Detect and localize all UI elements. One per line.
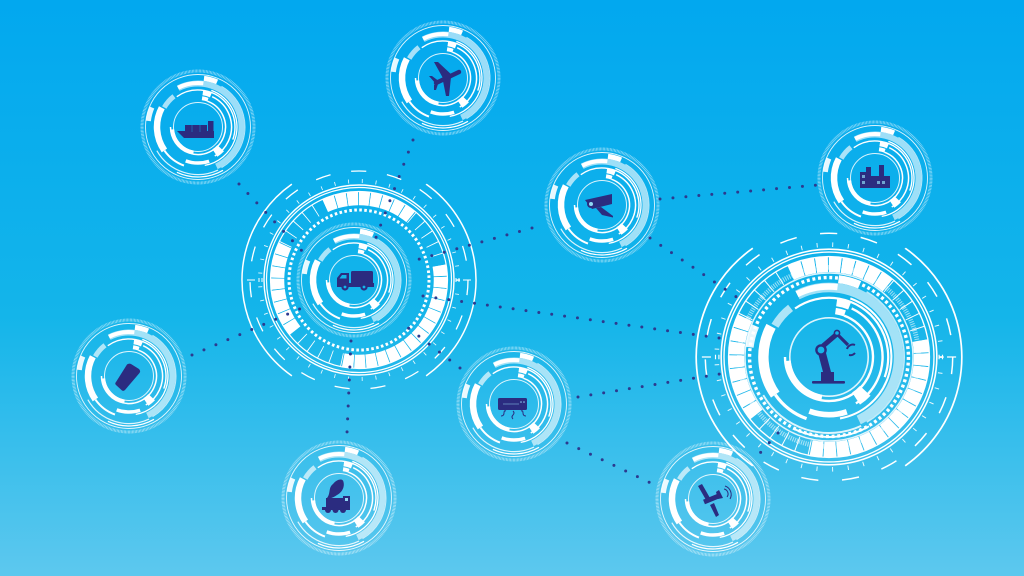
node: air conditioner [446,336,582,472]
hub: robot arm [644,172,1014,542]
node: SIM card [61,308,197,444]
node: satellite [645,431,781,567]
node: cargo ship [130,59,266,195]
icon: ship [177,121,214,138]
truck hub inner dial [286,212,422,348]
icon: robot arm [812,330,855,384]
icon: air conditioner [498,398,527,419]
icon: factory [860,165,890,188]
node: locomotive [271,430,407,566]
icon: security camera [585,194,613,218]
robot hub rings [644,172,1014,542]
robot hub inner dial [720,248,938,466]
icon: satellite [698,484,731,517]
icon: locomotive [322,480,350,513]
node: factory [807,110,943,246]
node: airplane [375,10,511,146]
truck hub rings [196,117,522,443]
hub: delivery truck [196,117,522,443]
dotted connectors [192,140,818,485]
icon: truck [337,271,374,291]
icon: SIM card [115,364,140,391]
icon: airplane [429,62,459,96]
node: security camera [534,137,670,273]
